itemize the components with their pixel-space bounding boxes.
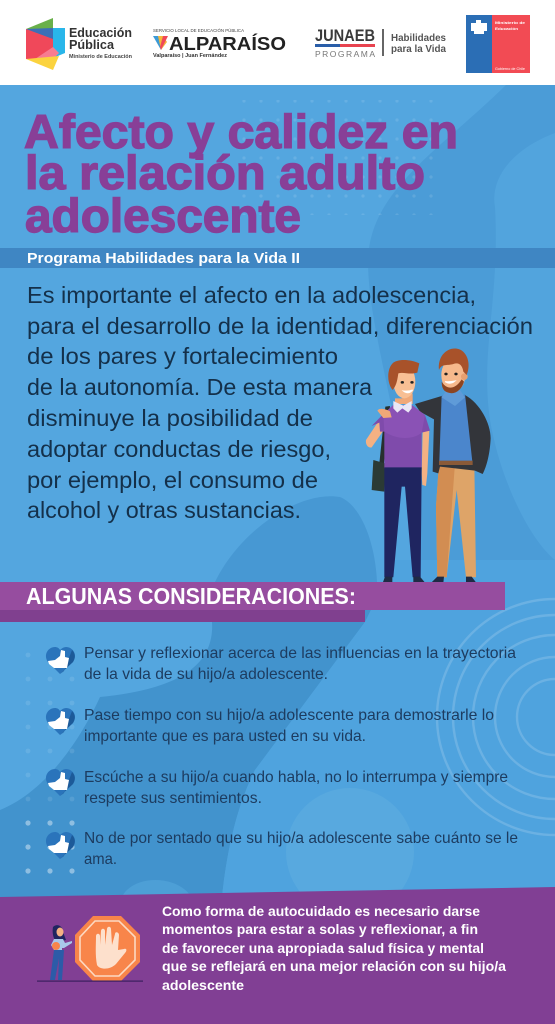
consideration 4: ama. [84,851,117,868]
icon: heart thumbs up [46,708,75,735]
logo: JUNAEB: PROGRAMA [315,49,375,59]
title [24,106,458,243]
footer text: que se reflejará en una mejor relación con su hijo/a [162,959,506,974]
icon: stop sign with hand [75,916,140,981]
consideration 2: importante que es para usted en su vida. [84,728,366,745]
adult [415,349,491,583]
logo: Valparaíso [153,27,286,59]
intro text: de la autonomía. De esta manera [27,374,373,400]
consideration 4 [46,830,518,868]
logo: Ministerio de Educación: Ministerio de [495,20,526,25]
intro text: por ejemplo, el consumo de [27,467,318,493]
subtitle band: Programa Habilidades para la Vida II [27,251,300,267]
consideration 2: Pase tiempo con su hijo/a adolescente para demostrarle lo [84,707,494,724]
footer text: adolescente [162,978,244,993]
consideration 1 [46,645,516,683]
illustration: teen and adult [366,349,491,583]
header bar [0,0,555,85]
logo: JUNAEB: Habilidades [391,32,446,44]
subtitle band [0,248,555,268]
consideration 2 [46,707,494,745]
title: Afecto y calidez en [24,106,458,159]
footer panel [0,887,555,1024]
consideration 3 [46,769,508,807]
icon: heart thumbs up [46,647,75,674]
icon: woman pointing [37,925,143,982]
logo: Educación Pública: Educación [69,26,132,40]
intro text: Es importante el afecto en la adolescencia, [27,282,476,308]
logo: Educación Pública [26,18,133,70]
logo: JUNAEB: JUNAEB [315,27,375,45]
intro text [27,282,533,523]
logo: Ministerio de Educación: Gobierno de Chile [495,67,525,71]
intro text: alcohol y otras sustancias. [27,497,301,523]
logo: Ministerio de Educación [466,15,530,73]
logo: Educación Pública: Pública [69,38,115,52]
consideration 1: de la vida de su hijo/a adolescente. [84,666,328,683]
logo: Educación Pública: Ministerio de Educación [69,54,133,60]
intro text: disminuye la posibilidad de [27,405,313,431]
icon: heart thumbs up [46,832,75,859]
consideration 1: Pensar y reflexionar acerca de las influencias en la trayectoria [84,645,516,662]
logo: Valparaíso: Valparaíso | Juan Fernández [153,53,227,59]
consideration 3: Escúche a su hijo/a cuando habla, no lo interrumpa y siempre [84,769,508,786]
footer text: Como forma de autocuidado es necesario darse [162,904,480,919]
logo: Valparaíso: SERVICIO LOCAL DE EDUCACIÓN PÚBLICA [153,27,245,33]
logo: Valparaíso: ALPARAÍSO [169,33,286,54]
section heading: algunas consideraciones [0,582,505,622]
title: adolescente [25,190,301,243]
intro text: adoptar conductas de riesgo, [27,436,331,462]
intro text: para el desarrollo de la identidad, diferenciación [27,313,533,339]
footer text: momentos para estar a solas y reflexionar, a fin [162,922,478,937]
logo: JUNAEB [315,27,446,59]
section heading: algunas consideraciones: ALGUNAS CONSIDERACIONES: [26,583,356,609]
intro text: de los pares y fortalecimiento [27,343,338,369]
consideration 4: No de por sentado que su hijo/a adolescente sabe cuánto se le [84,830,518,847]
footer text: de favorecer una apropiada salud física y mental [162,941,484,956]
teen [366,360,430,583]
icon: heart thumbs up [46,769,75,796]
title: la relación adulto [25,147,425,200]
logo: Ministerio de Educación: Educación [495,26,519,31]
logo: JUNAEB: para la Vida [391,43,446,55]
consideration 3: respete sus sentimientos. [84,790,262,807]
footer text [162,904,506,993]
